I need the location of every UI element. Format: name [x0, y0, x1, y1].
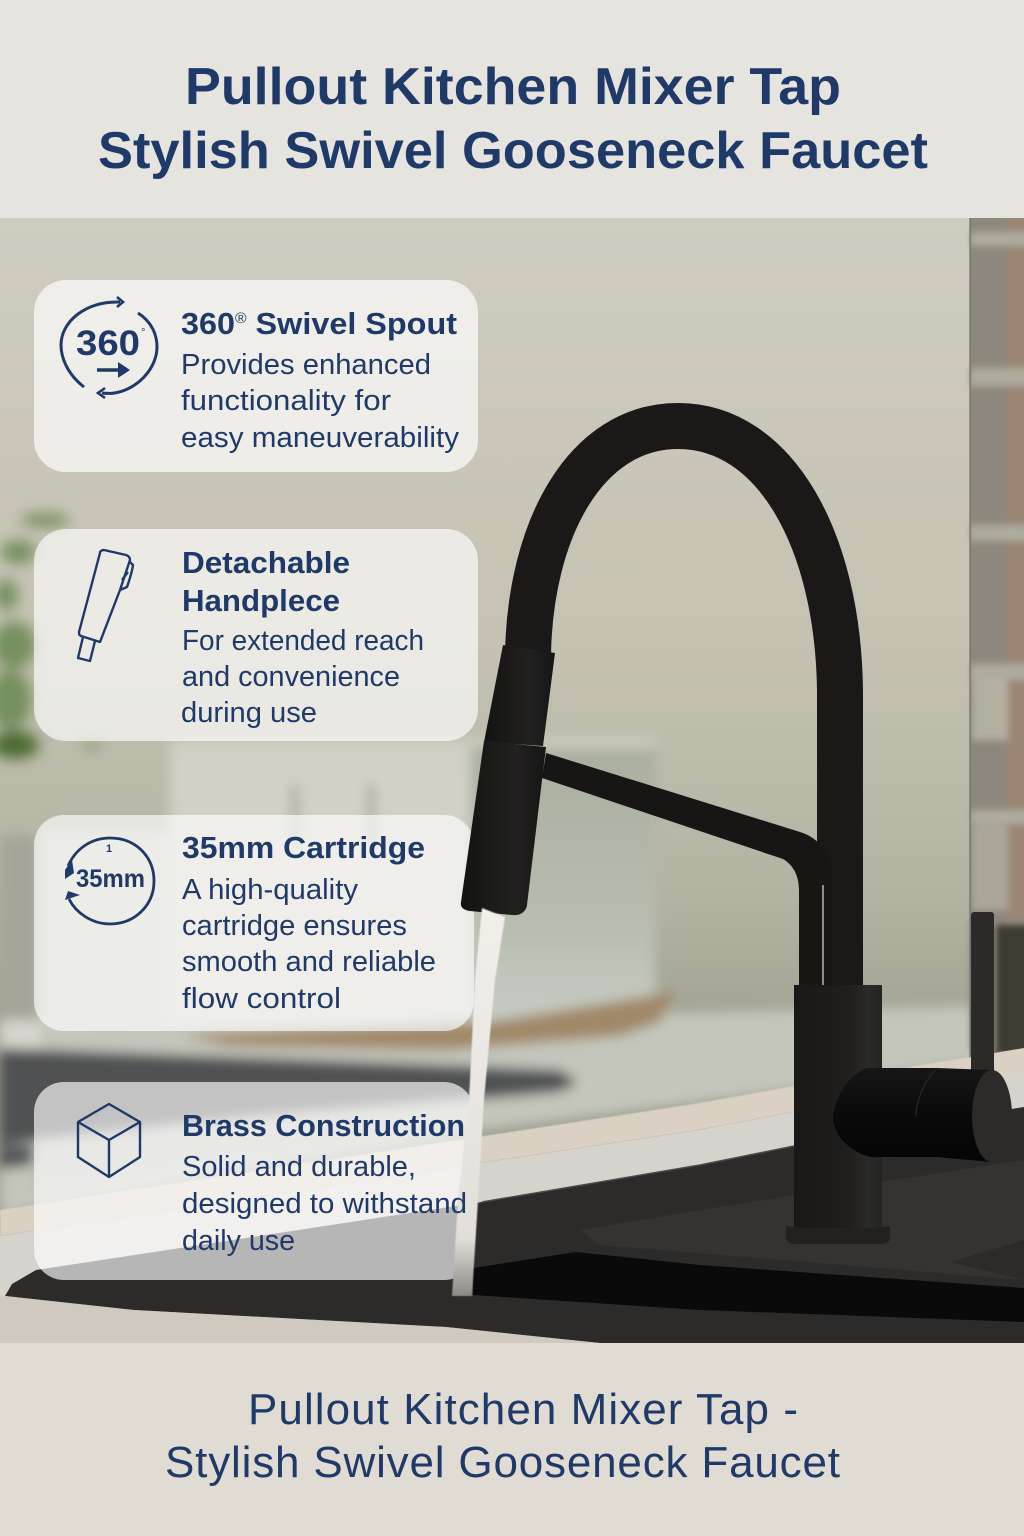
- panel: brass construction: [34, 1082, 474, 1280]
- text: brass description: designed to withstand: [182, 1188, 467, 1220]
- arched spout tube: [528, 426, 840, 1000]
- text: cartridge description: smooth and reliable: [182, 946, 436, 978]
- heading: 360 swivel spout: Swivel Spout: [247, 306, 457, 341]
- text: cartridge description: A high-quality: [182, 874, 358, 906]
- kitchen background photo: [0, 200, 1024, 1343]
- text: handpiece description: and convenience: [182, 661, 400, 693]
- text: 360 description: easy maneuverability: [181, 422, 460, 454]
- text: handpiece description: [181, 625, 424, 729]
- text: cartridge description: cartridge ensures: [182, 910, 407, 942]
- heading: brass construction: Brass Construction: [182, 1108, 465, 1143]
- text: brass description: Solid and durable,: [182, 1151, 416, 1183]
- icon: 35mm cartridge: 1: [106, 843, 112, 855]
- text: 360 description: Provides enhanced: [181, 349, 431, 381]
- cream band right of glass: [970, 1048, 1024, 1082]
- heading: 35mm cartridge: 35mm Cartridge: [182, 830, 425, 865]
- glass edge on the right: [969, 200, 1024, 1068]
- heading: 360 swivel spout: ®: [235, 310, 247, 327]
- icon: 35mm cartridge: 35mm: [76, 865, 145, 893]
- text: 360 description: [181, 349, 460, 454]
- footer caption: [165, 1385, 840, 1487]
- base plate: [786, 1226, 890, 1244]
- text: brass description: [182, 1151, 467, 1257]
- deck top edge highlight: [482, 1146, 794, 1202]
- header band: [0, 0, 1024, 218]
- icon: handpiece: [78, 550, 133, 661]
- text: handpiece description: during use: [181, 697, 317, 729]
- icon: 360 rotation: 360: [76, 324, 140, 363]
- panel: 35mm cartridge: [34, 815, 474, 1031]
- title: Stylish Swivel Gooseneck Faucet: [98, 122, 928, 180]
- left wall shade: [0, 835, 175, 1050]
- basin: [473, 1252, 1024, 1322]
- base body: [794, 985, 882, 1228]
- heading: detachable handpiece: Detachable: [182, 545, 350, 580]
- footer caption: Pullout Kitchen Mixer Tap -: [248, 1385, 798, 1434]
- footer band: [0, 1343, 1024, 1536]
- text: brass description: daily use: [182, 1225, 295, 1257]
- text: 360 description: functionality for: [181, 385, 391, 417]
- icon: 360 rotation: [61, 297, 157, 398]
- connecting bar: [542, 753, 832, 990]
- text: handpiece description: For extended reach: [182, 625, 424, 657]
- lower sleeve: [461, 741, 546, 915]
- lever stem: [971, 912, 994, 1077]
- wood tray: [180, 992, 674, 1050]
- icon: cube: [78, 1104, 140, 1177]
- heading: 360 swivel spout: 360: [181, 306, 233, 341]
- panel: detachable handpiece: [34, 529, 478, 741]
- lower counter corner: [0, 1296, 600, 1343]
- icon: 35mm cartridge: [65, 838, 154, 924]
- dark tray on counter: [0, 1048, 578, 1145]
- faucet: [461, 426, 1012, 1244]
- white appliance: [170, 745, 470, 1030]
- cream counter band: [0, 1048, 1024, 1300]
- title: [98, 58, 928, 180]
- heading: detachable handpiece: Handplece: [182, 583, 340, 618]
- plant: [0, 513, 102, 759]
- heading: detachable handpiece: [182, 545, 350, 618]
- text: cartridge description: [182, 874, 436, 1015]
- lever end cap: [972, 1070, 1012, 1162]
- title: Pullout Kitchen Mixer Tap: [185, 58, 841, 116]
- water stream: [452, 908, 505, 1296]
- footer caption: Stylish Swivel Gooseneck Faucet: [165, 1438, 840, 1487]
- text: cartridge description: flow control: [182, 983, 341, 1015]
- sink deck: [5, 1107, 1024, 1343]
- upper sleeve: [484, 645, 555, 746]
- lever handle: [833, 1068, 992, 1162]
- icon: 360 rotation: °: [141, 327, 145, 339]
- counter behind: [0, 1005, 1024, 1215]
- panel: 360 swivel spout: [34, 280, 478, 472]
